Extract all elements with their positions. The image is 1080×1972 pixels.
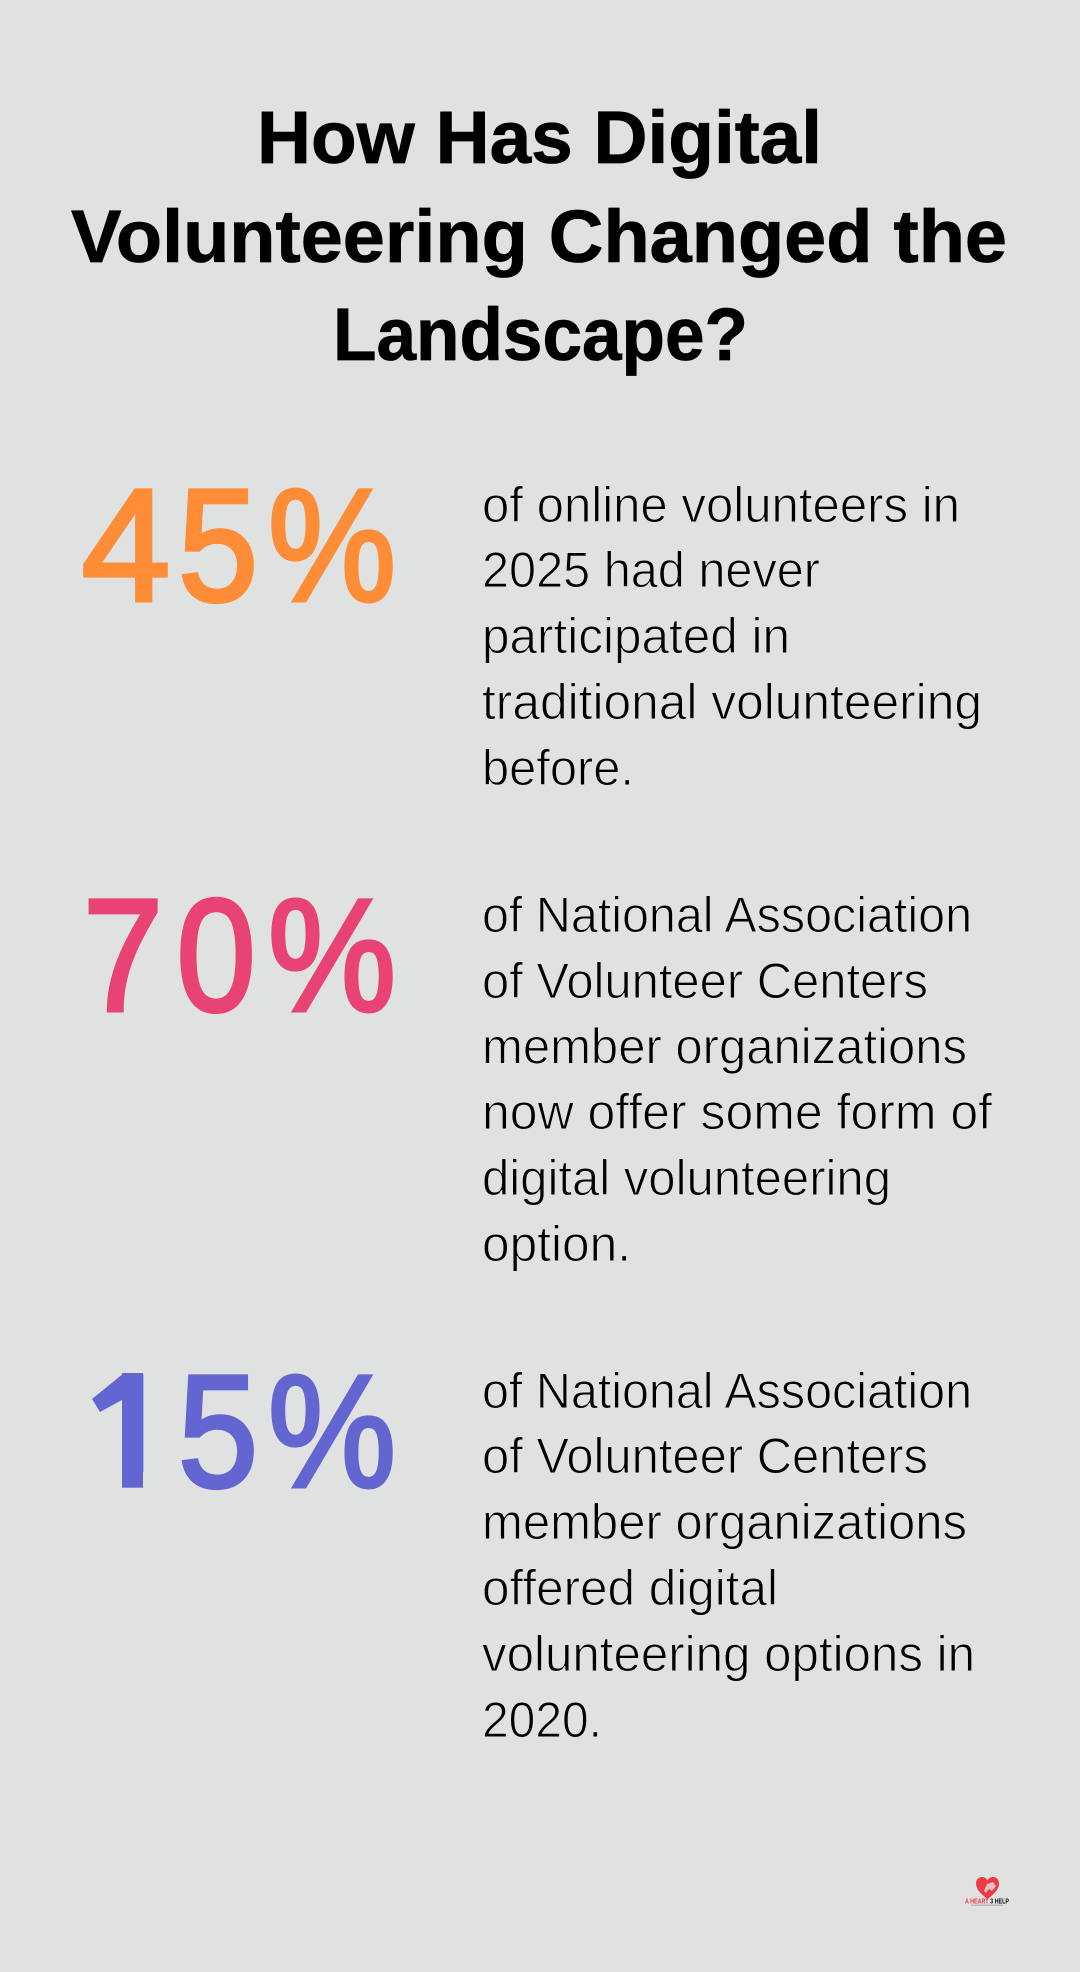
stat number: 45%: % bbox=[268, 456, 396, 635]
stat panel: 15% bbox=[92, 1372, 972, 1737]
stat description: 70%: of National Association bbox=[482, 887, 972, 943]
stat number: 45%: 4 bbox=[82, 456, 170, 634]
stat number: 70%: 7 bbox=[83, 866, 163, 1045]
stat panel: 70% bbox=[83, 866, 992, 1272]
stat description: 45% bbox=[482, 477, 982, 796]
stat number: 45%: 5 bbox=[178, 456, 258, 635]
stat number: 70%: 0 bbox=[176, 867, 256, 1045]
infographic canvas bbox=[71, 108, 1009, 1906]
stat description: 15% bbox=[482, 1363, 975, 1748]
stat number: 70% bbox=[83, 866, 396, 1045]
title: Volunteering Changed the bbox=[71, 195, 1007, 278]
logo tagline bbox=[971, 1904, 1003, 1906]
stat description: 45%: traditional volunteering bbox=[482, 674, 982, 730]
title: How Has Digital bbox=[257, 96, 822, 179]
stat number: 45% bbox=[82, 456, 396, 635]
stat number: 15% bbox=[92, 1373, 393, 1490]
stat description: 70%: member organizations bbox=[482, 1018, 967, 1074]
stat number: 15%: 5 bbox=[178, 1342, 258, 1521]
stat description: 15%: offered digital bbox=[482, 1560, 778, 1616]
stat description: 45%: before. bbox=[482, 740, 634, 796]
stat description: 45%: 2025 had never bbox=[482, 542, 820, 598]
stat number: 15%: 1 bbox=[87, 1342, 176, 1520]
stat panel: 45% bbox=[82, 456, 982, 796]
stat description: 45%: of online volunteers in bbox=[482, 477, 960, 533]
logo wordmark: A HEART 3 HELP bbox=[965, 1896, 1009, 1906]
stat description: 70%: of Volunteer Centers bbox=[482, 953, 928, 1009]
title: Landscape? bbox=[333, 293, 748, 376]
stat description: 70% bbox=[482, 887, 992, 1272]
stat description: 15%: volunteering options in bbox=[482, 1626, 975, 1682]
logo: A Heart 3 Help bbox=[965, 1877, 1009, 1906]
stat description: 15%: of National Association bbox=[482, 1363, 972, 1419]
stat description: 15%: 2020. bbox=[482, 1692, 602, 1748]
stat description: 70%: digital volunteering bbox=[482, 1150, 891, 1206]
stat description: 70%: now offer some form of bbox=[482, 1084, 992, 1140]
stat description: 15%: of Volunteer Centers bbox=[482, 1428, 928, 1484]
icon: heart with hands bbox=[976, 1877, 999, 1899]
stat number: 70%: % bbox=[268, 866, 396, 1045]
stat description: 15%: member organizations bbox=[482, 1494, 967, 1550]
stat description: 70%: option. bbox=[482, 1216, 631, 1272]
stat description: 45%: participated in bbox=[482, 608, 790, 664]
title bbox=[71, 96, 1007, 376]
stat number: 15%: % bbox=[268, 1342, 396, 1521]
